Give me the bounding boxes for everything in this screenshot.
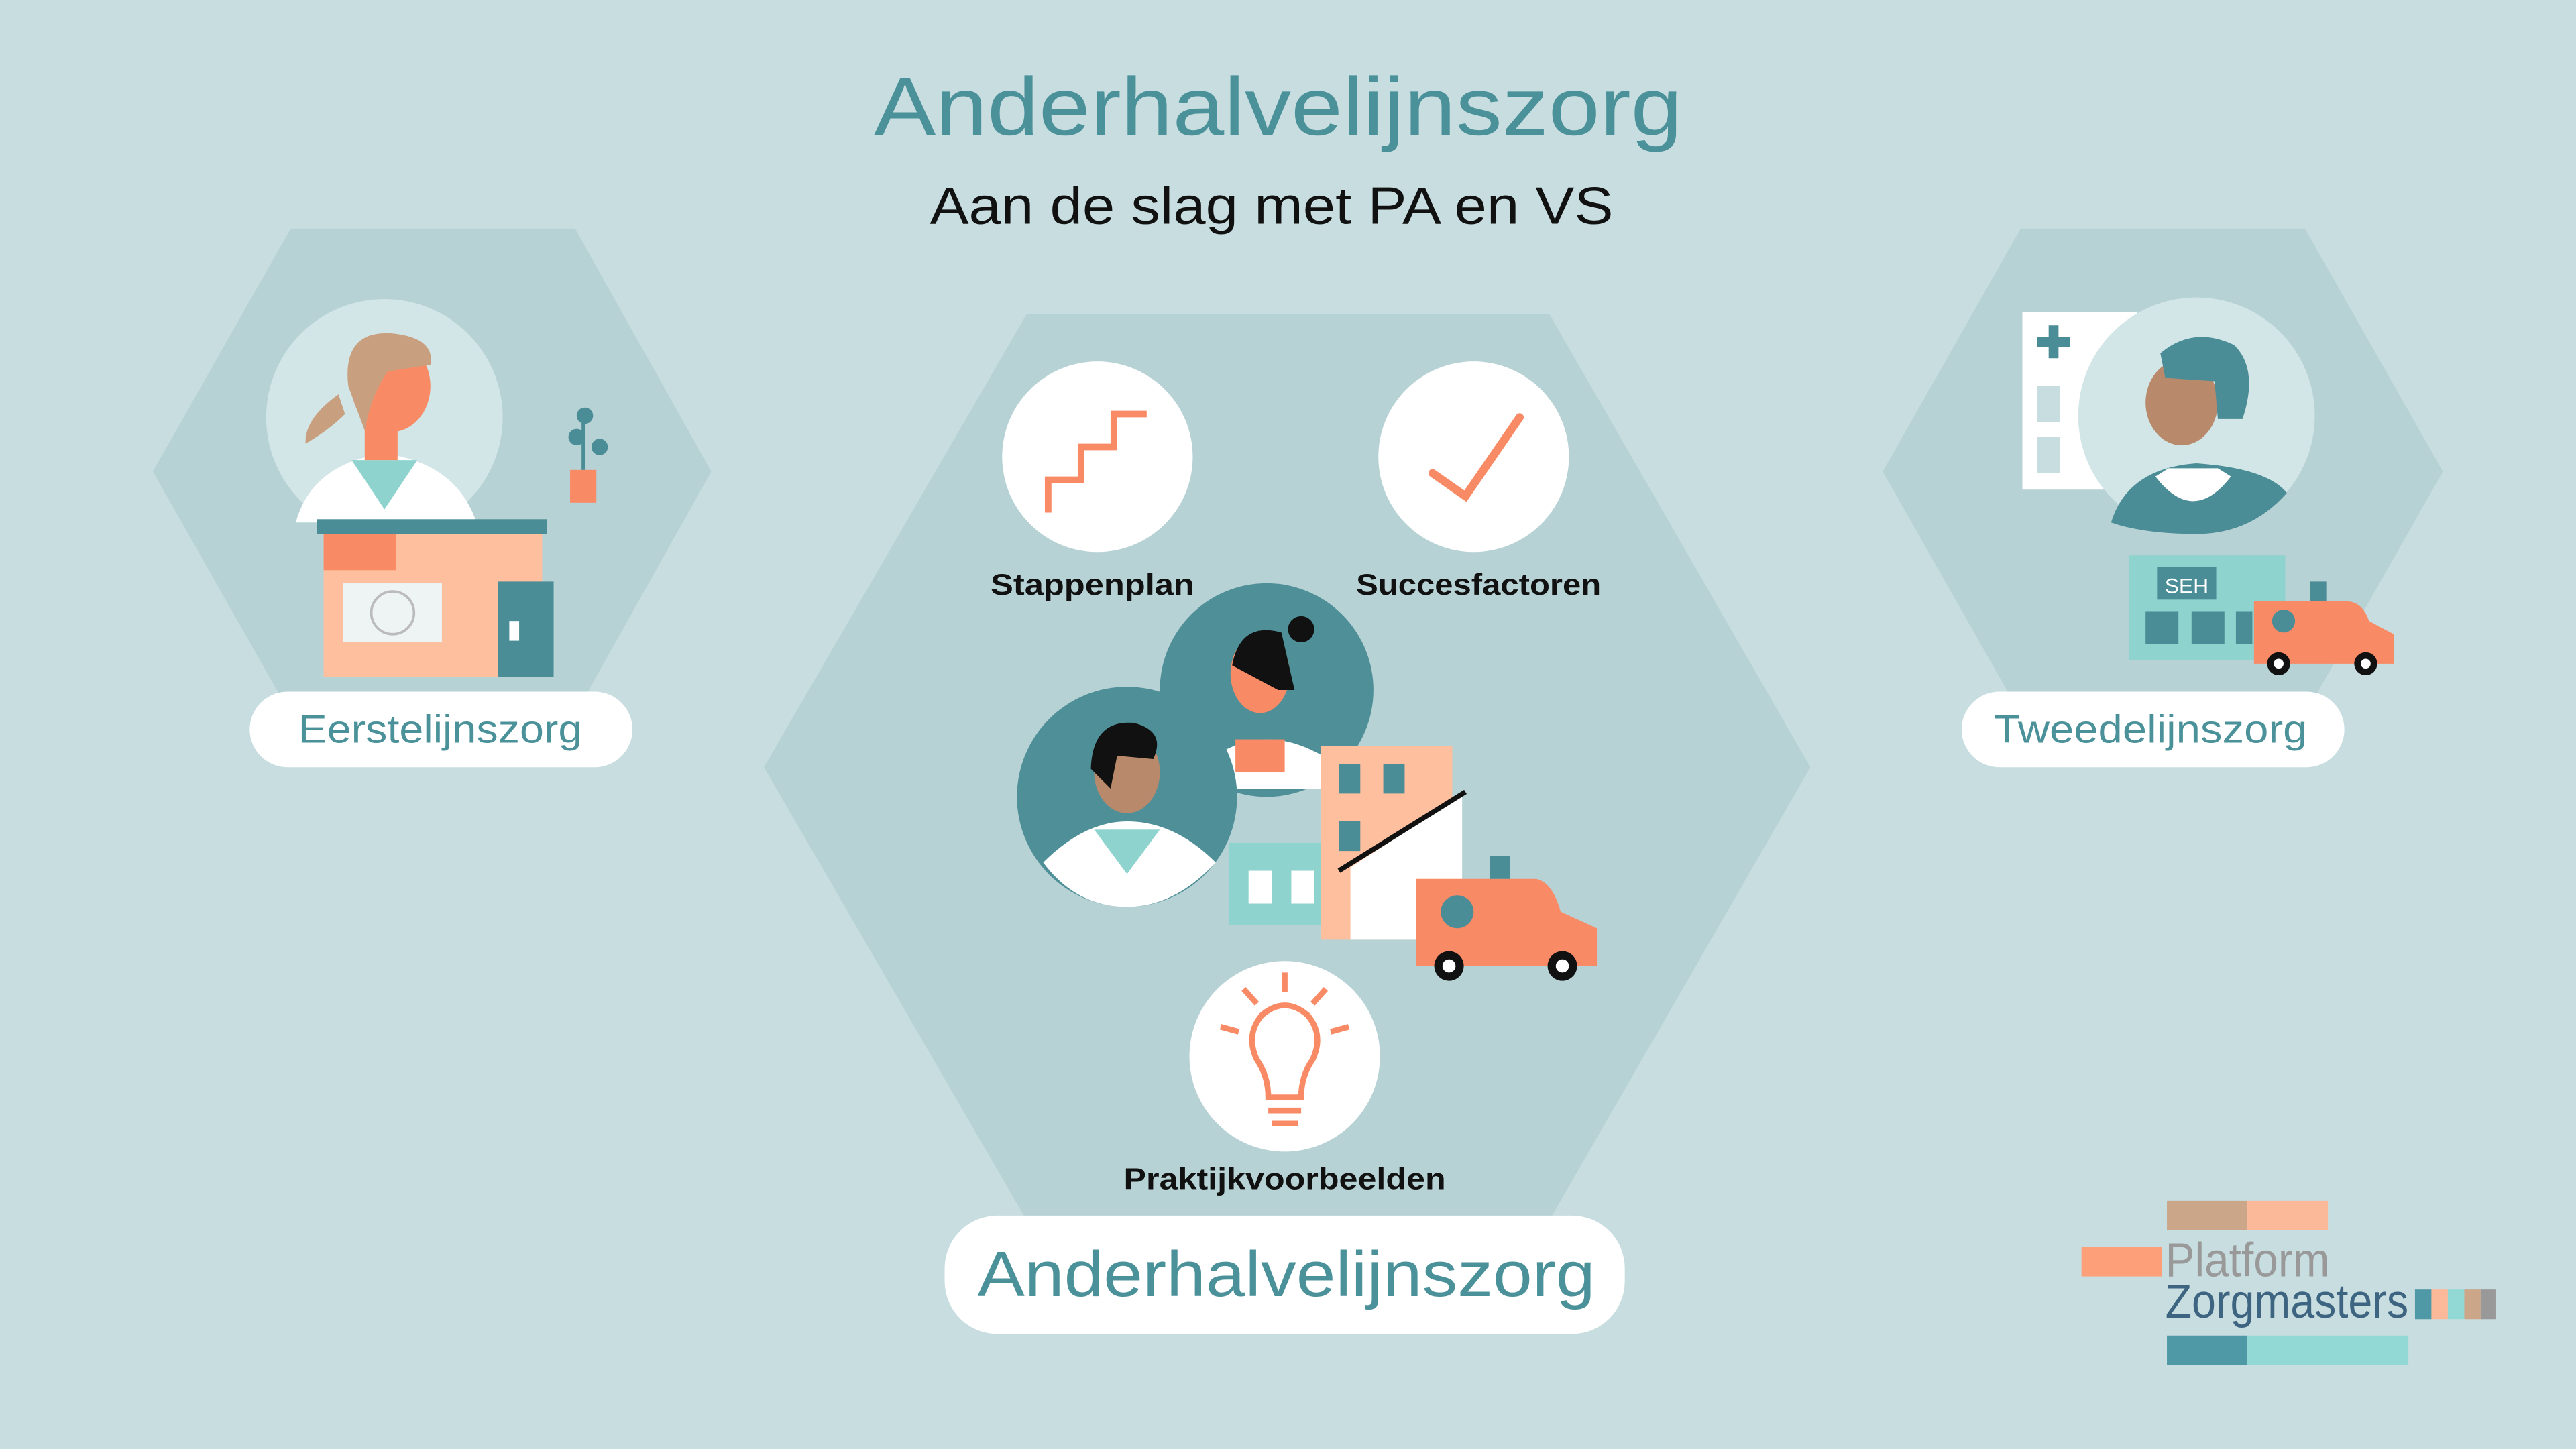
icon: succesfactoren: Succesfactoren (1356, 569, 1601, 601)
panel: anderhalvelijnszorg (764, 314, 1810, 1220)
pill: Anderhalvelijnszorg: Anderhalvelijnszorg (978, 1239, 1595, 1310)
panel: tweedelijnszorg (1883, 229, 2443, 715)
icon: practice building (317, 519, 554, 677)
logo: Platform Zorgmasters: Platform (2166, 1234, 2330, 1287)
icon: SEH building and ambulance: SEH (2165, 574, 2208, 598)
icon: two professionals (1017, 583, 1374, 907)
pill: Tweedelijnszorg: Tweedelijnszorg (1994, 707, 2307, 751)
logo: Platform Zorgmasters: Zorgmasters (2166, 1275, 2408, 1328)
icon: ambulance (1416, 856, 1597, 981)
icon: stappenplan (991, 361, 1194, 601)
pill: Tweedelijnszorg (1962, 692, 2345, 767)
pill: Eerstelijnszorg: Eerstelijnszorg (298, 707, 582, 751)
pill: Eerstelijnszorg (249, 692, 632, 767)
title: Anderhalvelijnszorg (874, 60, 1682, 152)
icon: plant (569, 408, 608, 503)
icon: doctor woman (266, 299, 503, 536)
panel: eerstelijnszorg (153, 229, 712, 715)
icon: stappenplan: Stappenplan (991, 569, 1194, 601)
icon: lightbulb (1124, 961, 1446, 1196)
logo: Platform Zorgmasters (2082, 1201, 2496, 1365)
icon: hospital (2022, 312, 2137, 489)
icon: SEH building and ambulance (2129, 555, 2394, 675)
icon: succesfactoren (1356, 361, 1601, 601)
icon: lightbulb: Praktijkvoorbeelden (1124, 1163, 1446, 1196)
subtitle: Aan de slag met PA en VS (930, 176, 1614, 235)
icon: buildings (1229, 746, 1465, 939)
icon: surgeon (2078, 298, 2315, 534)
pill: Anderhalvelijnszorg (945, 1216, 1625, 1334)
